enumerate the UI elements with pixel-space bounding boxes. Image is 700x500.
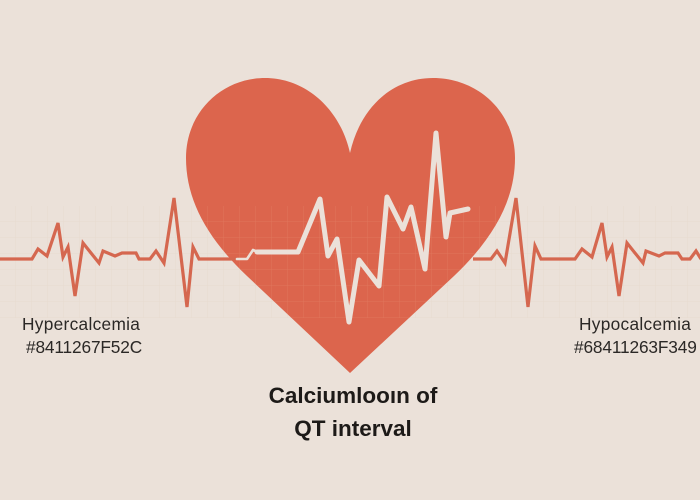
title: QT interval — [294, 416, 412, 441]
heart ECG trace — [237, 133, 468, 322]
right ECG trace — [473, 198, 700, 307]
left ECG trace — [0, 198, 236, 307]
label: Hypocalcemia: Hypocalcemia — [579, 314, 691, 334]
title — [269, 383, 438, 441]
heart — [180, 78, 520, 373]
background grid — [0, 206, 700, 318]
label: Hypocalcemia — [574, 314, 697, 357]
label: Hypercalcemia — [22, 314, 142, 357]
label: Hypocalcemia: #68411263F349 — [574, 337, 697, 357]
label: Hypercalcemia: #8411267F52C — [26, 337, 142, 357]
title: Calciumlooın of — [269, 383, 437, 408]
label: Hypercalcemia: Hypercalcemia — [22, 314, 140, 334]
illustration: heart and ECG traces — [0, 78, 700, 373]
